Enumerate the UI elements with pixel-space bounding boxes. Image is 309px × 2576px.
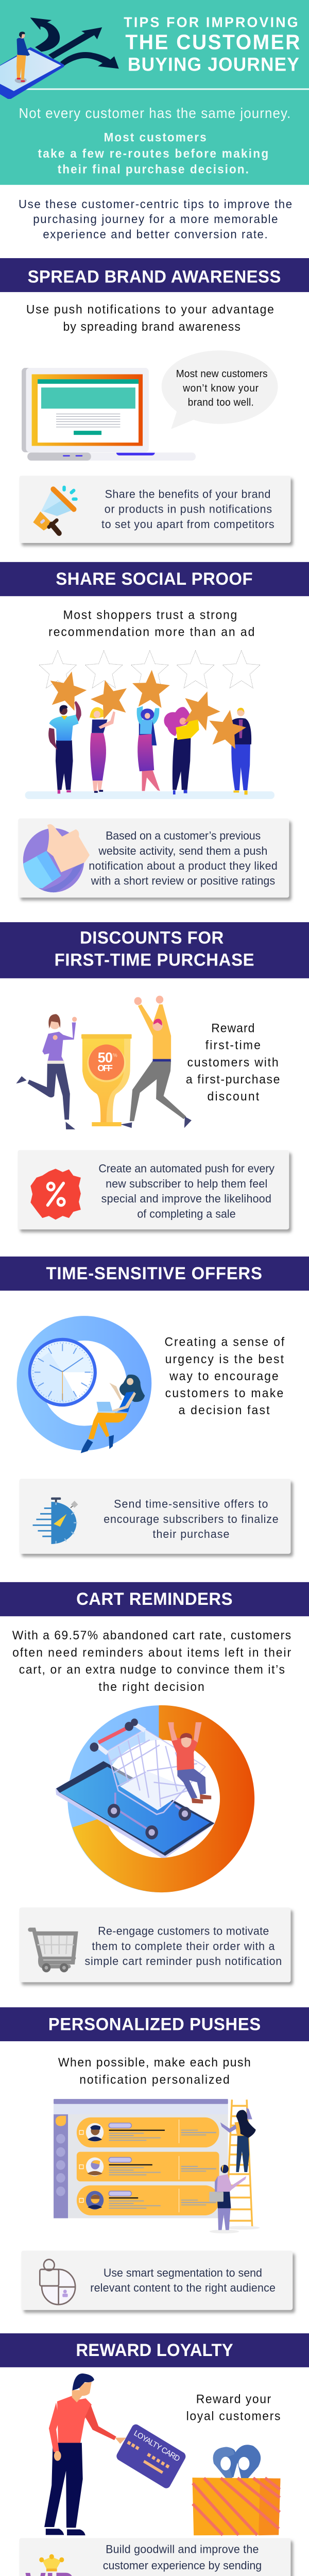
intro paragraph: purchasing journey for a more memorable <box>33 212 278 226</box>
text: reward first-time customers: a first-purchase <box>186 1072 280 1086</box>
panel: build goodwill <box>19 2538 290 2576</box>
icon: VIP crown <box>25 2554 75 2576</box>
text: re-engage customers <box>85 1924 282 1968</box>
icon: thumbs up <box>20 824 90 893</box>
heading: spread brand awareness <box>0 258 309 292</box>
text: most shoppers <box>48 608 254 638</box>
person 1 <box>48 701 81 793</box>
text: send time-sensitive offers: encourage subscribers to finalize <box>104 1512 279 1526</box>
text: reward your loyal customers <box>186 2392 281 2423</box>
text: smart segmentation: relevant content to the right audience <box>90 2281 276 2294</box>
panel: share the benefits <box>19 476 290 543</box>
intro statement: Not every customer has the same journey. <box>19 105 290 121</box>
text: based on previous activity <box>89 829 278 887</box>
text: creating urgency: Creating a sense of <box>165 1335 285 1349</box>
person 2 <box>90 707 115 793</box>
text: share the benefits <box>101 487 274 531</box>
icon: shopping cart <box>30 1929 76 1972</box>
text: re-engage customers: simple cart reminder push notification <box>85 1955 282 1968</box>
title: THE CUSTOMER <box>125 31 300 54</box>
text: creating urgency: urgency is the best <box>165 1352 284 1366</box>
text: re-engage customers: Re-engage customers to motivate <box>98 1924 269 1938</box>
section: cart reminders <box>0 1582 309 1982</box>
text: use push notifications: Use push notifications to your advantage <box>26 302 274 316</box>
woman on ladder <box>220 2108 256 2172</box>
ladder <box>226 2099 252 2228</box>
text: creating urgency: customers to make <box>165 1386 283 1400</box>
panel: smart segmentation <box>21 2251 293 2310</box>
text: reward first-time customers: Reward <box>211 1021 254 1035</box>
text: creating urgency: way to encourage <box>169 1369 279 1383</box>
section: discounts for first-time purchase <box>0 922 309 1229</box>
text: use push notifications: by spreading brand awareness <box>63 320 241 333</box>
bold intro statement <box>38 130 268 176</box>
section: share social proof <box>0 562 309 897</box>
man sitting on cart <box>168 1722 211 1804</box>
bold intro statement: Most customers <box>104 130 207 144</box>
panel: send time-sensitive offers <box>19 1479 290 1554</box>
bold intro statement: take a few re-routes before making <box>38 146 268 160</box>
text: automated push: of completing a sale <box>137 1207 236 1220</box>
illustration: man offering a loyalty card <box>44 2374 187 2535</box>
text: when possible <box>58 2056 251 2087</box>
heading: reward loyalty: REWARD LOYALTY <box>76 2340 233 2360</box>
heading: share social proof <box>0 562 309 596</box>
divider line <box>26 89 309 90</box>
text: send time-sensitive offers: Send time-sensitive offers to <box>114 1497 268 1511</box>
intro paragraph: Use these customer-centric tips to improve the <box>19 197 292 211</box>
title <box>124 14 300 75</box>
woman <box>16 1014 77 1129</box>
person 5 <box>231 708 251 794</box>
heading: personalized pushes: PERSONALIZED PUSHES <box>48 2014 261 2035</box>
icon: megaphone <box>33 486 78 533</box>
heading: discounts for first-time purchase: DISCOUNTS FOR <box>80 928 224 948</box>
text: when possible: When possible, make each push <box>58 2056 251 2069</box>
heading: reward loyalty <box>0 2333 309 2367</box>
callout: speech bubble <box>162 350 278 429</box>
heading: time-sensitive offers <box>0 1257 309 1291</box>
orange stars <box>45 667 249 750</box>
text: automated push <box>98 1162 274 1220</box>
section: personalized pushes <box>0 2007 309 2310</box>
callout: speech bubble: won’t know your <box>182 382 259 394</box>
text: share the benefits: to set you apart from competitors <box>101 517 274 531</box>
illustration: phone with shopping cart and man <box>56 1719 215 1858</box>
text: automated push: special and improve the likelihood <box>101 1192 271 1205</box>
illustration: customer profile dashboard <box>54 2099 260 2233</box>
woman with laptop <box>209 2165 246 2230</box>
text: reward first-time customers <box>186 1021 280 1103</box>
section: reward loyalty <box>0 2333 309 2576</box>
bold intro statement: their final purchase decision. <box>58 162 249 176</box>
text: abandoned cart rate: With a 69.57% abandoned cart rate, customers <box>12 1629 291 1642</box>
icon: laptop with web page <box>22 368 196 461</box>
illustration: gift box <box>192 2445 281 2535</box>
text: creating urgency <box>165 1335 285 1417</box>
text: most shoppers: Most shoppers trust a strong <box>63 608 237 621</box>
heading: discounts for first-time purchase <box>0 922 309 978</box>
man <box>121 996 192 1128</box>
heading: spread brand awareness: SPREAD BRAND AWARENESS <box>28 267 281 287</box>
hero panel <box>0 0 309 185</box>
text: smart segmentation <box>90 2266 276 2294</box>
loyalty card <box>115 2422 187 2490</box>
trophy <box>81 1034 132 1126</box>
text: when possible: notification personalized <box>79 2073 230 2087</box>
text: creating urgency: a decision fast <box>179 1403 270 1417</box>
text: based on previous activity: website activity, send them a push <box>98 844 267 857</box>
text: abandoned cart rate: cart, or an extra nudge to convince them it’s <box>19 1663 285 1676</box>
text: share the benefits: Share the benefits of your brand <box>105 487 270 500</box>
text: use push notifications <box>26 302 274 333</box>
text: abandoned cart rate: the right decision <box>98 1680 204 1693</box>
text: send time-sensitive offers: their purchase <box>153 1527 229 1540</box>
icon: percent badge <box>30 1169 81 1219</box>
text: abandoned cart rate: often need reminders about items left in their <box>12 1646 291 1659</box>
section: time-sensitive offers <box>0 1257 309 1554</box>
cart <box>90 1719 205 1839</box>
person 3 <box>137 706 160 791</box>
panel: re-engage customers <box>19 1907 290 1982</box>
text: based on previous activity: Based on a customer’s previous <box>106 829 261 842</box>
text: reward your loyal customers: loyal customers <box>186 2409 281 2423</box>
person 4 <box>164 707 199 794</box>
panel: based on previous activity <box>18 819 289 897</box>
text: smart segmentation: Use smart segmentation to send <box>104 2266 262 2279</box>
text: reward first-time customers: first-time <box>205 1038 261 1052</box>
callout: speech bubble: Most new customers <box>176 368 268 380</box>
chart: donut showing abandoned cart rate <box>67 1705 254 1892</box>
text: most shoppers: recommendation more than an ad <box>48 625 254 638</box>
trophy: OFF <box>97 1062 113 1073</box>
heading: cart reminders: CART REMINDERS <box>76 1589 233 1609</box>
heading: cart reminders <box>0 1582 309 1616</box>
illustration: people holding up review stars <box>25 651 274 799</box>
text: based on previous activity: with a short review or positive ratings <box>91 874 275 887</box>
heading: time-sensitive offers: TIME-SENSITIVE OFFERS <box>46 1263 262 1283</box>
heading: personalized pushes <box>0 2007 309 2041</box>
text: reward first-time customers: discount <box>208 1089 260 1103</box>
text: reward first-time customers: customers with <box>187 1056 279 1069</box>
trophy: 50 <box>98 1049 113 1065</box>
text: abandoned cart rate <box>12 1629 291 1693</box>
intro paragraph: experience and better conversion rate. <box>43 227 268 241</box>
icon: stopwatch <box>33 1498 78 1544</box>
text: share the benefits: or products in push notifications <box>105 502 272 516</box>
text: reward your loyal customers: Reward your <box>196 2392 271 2406</box>
text: automated push: new subscriber to help them feel <box>106 1177 267 1190</box>
title: BUYING JOURNEY <box>128 54 299 75</box>
title: TIPS FOR IMPROVING <box>124 14 298 30</box>
panel: automated push <box>18 1150 289 1229</box>
text: automated push: Create an automated push for every <box>98 1162 274 1175</box>
trophy: % <box>113 1053 117 1059</box>
callout: speech bubble: brand too well. <box>188 397 254 409</box>
illustration: people celebrating beside a 50% off trophy <box>16 996 192 1129</box>
section: spread brand awareness <box>0 258 309 543</box>
icon: segmented audience circle <box>40 2260 75 2304</box>
woman with laptop <box>81 1375 145 1453</box>
intro paragraph <box>19 197 292 241</box>
text: build goodwill <box>100 2543 264 2576</box>
text: build goodwill: customer experience by sending <box>103 2559 262 2572</box>
text: send time-sensitive offers <box>104 1497 279 1540</box>
heading: discounts for first-time purchase: FIRST-TIME PURCHASE <box>55 950 254 970</box>
illustration: clock and woman on a ring <box>17 1316 151 1453</box>
heading: share social proof: SHARE SOCIAL PROOF <box>56 569 253 589</box>
text: re-engage customers: them to complete their order with a <box>92 1939 275 1953</box>
text: build goodwill: Build goodwill and improve the <box>106 2543 259 2556</box>
icon: person choosing between arrows on a phone <box>0 18 119 99</box>
text: based on previous activity: notification about a product they liked <box>89 859 278 872</box>
loyalty card: LOYALTY CARD <box>132 2429 181 2464</box>
